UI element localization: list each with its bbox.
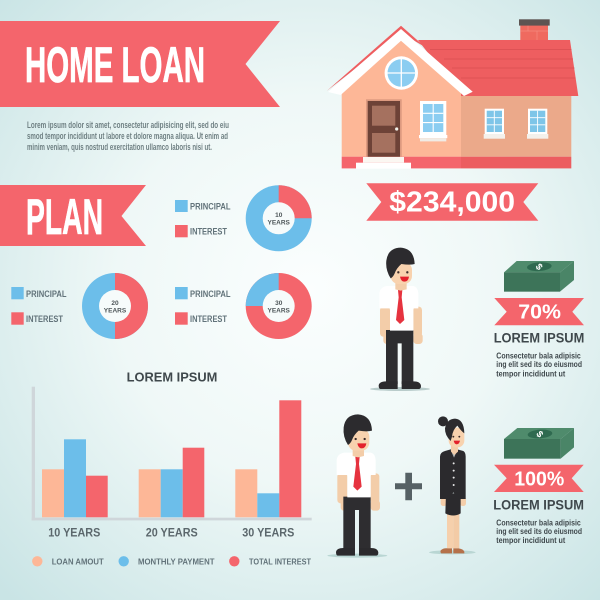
icon: money stack 100% — [504, 428, 574, 459]
door — [366, 99, 402, 157]
legend: 10 years — [175, 200, 231, 237]
legend: 30 years — [175, 287, 231, 325]
round window — [385, 56, 418, 90]
ribbon: 100%: 100% — [514, 468, 565, 490]
legend: 30 years: INTEREST — [190, 314, 227, 324]
side window right — [527, 109, 548, 139]
chart legend: LOAN AMOUT — [52, 556, 104, 566]
foundation — [342, 157, 571, 168]
donut chart: 30 years: YEARS — [267, 308, 291, 314]
legend: 20 years: INTEREST — [26, 314, 63, 324]
axis labels: 20 YEARS — [146, 526, 198, 540]
ribbon: 70%: 70% — [518, 302, 561, 324]
legend: 20 years: PRINCIPAL — [26, 289, 67, 299]
title banner: HOME LOAN — [25, 37, 205, 93]
door steps — [356, 157, 411, 169]
text block: 70%: LOREM IPSUM — [494, 331, 584, 346]
text block: 100%: Consectetur bala adipisic — [496, 518, 581, 527]
text block: 70%: ing elit sed its do eiusmod — [496, 360, 582, 369]
donut chart: 30 years: 30 — [275, 300, 283, 307]
bars: 20 years — [139, 448, 204, 517]
ribbon: 70% — [494, 298, 584, 325]
price ribbon — [366, 183, 538, 221]
chimney — [519, 19, 550, 41]
intro text block — [27, 120, 229, 153]
front window — [419, 101, 447, 141]
legend: 30 years: PRINCIPAL — [190, 289, 231, 299]
text block: 100%: LOREM IPSUM — [493, 497, 584, 512]
chart legend: TOTAL INTEREST — [249, 556, 312, 566]
bars: 10 years — [42, 439, 108, 517]
donut chart: 10 years: 10 — [275, 212, 283, 219]
chart legend — [32, 556, 312, 566]
figure: man — [327, 414, 387, 558]
legend: 20 years — [11, 287, 67, 325]
side window left — [484, 109, 505, 139]
legend: 10 years: PRINCIPAL — [190, 202, 231, 212]
title banner — [0, 21, 280, 107]
axis labels: 30 YEARS — [242, 526, 294, 540]
text block: 100%: ing elit sed its do eiusmod — [496, 527, 582, 536]
donut chart: 10 years: YEARS — [267, 220, 291, 226]
intro text block: smod tempor incididunt ut labore et dolore magna aliqua. Ut enim ad — [27, 131, 228, 142]
plan banner: PLAN — [26, 189, 103, 245]
icon: house — [327, 19, 578, 169]
intro text block: minim veniam, quis nostrud exercitation ullamco laboris nisi ut. — [27, 142, 212, 153]
icon: money stack 70%: $ — [534, 262, 545, 273]
bar chart — [32, 387, 312, 540]
donut chart: 30 years — [246, 273, 312, 339]
gable roof trim — [327, 26, 473, 96]
text block: 100%: tempor incididunt ut — [496, 536, 566, 545]
main gable wall — [342, 41, 461, 157]
donut chart: 20 years: YEARS — [104, 308, 127, 314]
icon: money stack 70% — [504, 261, 574, 292]
legend: 10 years: INTEREST — [190, 226, 227, 236]
price ribbon: $234,000 — [389, 187, 515, 219]
donut chart: 20 years — [82, 273, 148, 339]
text block: 70%: Consectetur bala adipisic — [496, 351, 581, 360]
side wall — [461, 96, 571, 157]
figure: woman — [429, 416, 476, 554]
text block: 70% — [494, 331, 584, 378]
icon: money stack 100%: $ — [534, 429, 546, 440]
donut chart: 20 years: 20 — [111, 300, 119, 307]
chart legend: MONTHLY PAYMENT — [138, 556, 215, 566]
chart heading: LOREM IPSUM — [127, 370, 217, 384]
plan banner — [0, 185, 146, 246]
red roof — [418, 40, 578, 96]
donut chart: 10 years — [246, 185, 312, 251]
figure: standing man — [370, 248, 430, 391]
text block: 70%: tempor incididunt ut — [496, 369, 566, 378]
axis labels — [48, 526, 294, 540]
axis labels: 10 YEARS — [48, 526, 100, 540]
intro text block: Lorem ipsum dolor sit amet, consectetur adipisicing elit, sed do eiu — [27, 120, 229, 131]
bars: 30 years — [235, 400, 301, 517]
text block: 100% — [493, 497, 584, 545]
ribbon: 100% — [494, 465, 584, 492]
icon: plus sign — [395, 473, 422, 500]
